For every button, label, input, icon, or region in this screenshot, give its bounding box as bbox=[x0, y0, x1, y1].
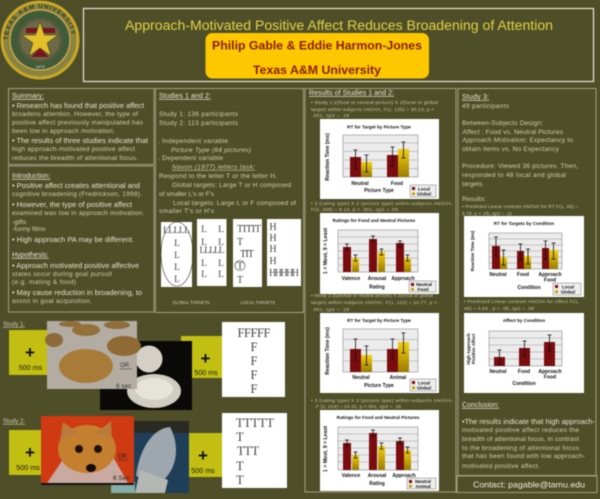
introduction text bbox=[12, 181, 144, 244]
panel: results of studies 1 and 2 bbox=[305, 88, 456, 492]
OR label: OR bbox=[118, 454, 128, 460]
fixation slide: 500 ms bbox=[191, 466, 215, 475]
summary text: positive affect previously manipulated has bbox=[12, 120, 144, 126]
study 3 design text: responded to 48 local and global bbox=[462, 172, 567, 179]
panel: study 3 bbox=[458, 88, 596, 476]
bar chart: RT study 1: Picture Type bbox=[364, 188, 394, 194]
navon card: local H: H bbox=[269, 222, 277, 233]
bar chart: RT by condition bbox=[464, 216, 584, 297]
navon stimulus: letter F: F bbox=[251, 368, 258, 382]
bar chart: ratings study 1: Ratings for Food and Neutral Pictures bbox=[333, 218, 416, 223]
bar chart: RT by condition: Food bbox=[517, 272, 529, 278]
navon stimulus: letter F: F bbox=[251, 340, 258, 354]
navon card: local H: H bbox=[269, 244, 277, 255]
statistics: study 2: .001, ηp2 = .18 bbox=[312, 307, 349, 313]
bar chart: RT study 1 bbox=[320, 119, 439, 199]
heading: summary: Summary: bbox=[12, 93, 44, 100]
navon card: global U: L bbox=[201, 270, 207, 280]
navon card: global L: L bbox=[174, 251, 180, 261]
introduction text: • Positive affect creates attentional and bbox=[12, 181, 140, 190]
conclusion text: to the broadening of attentional focus bbox=[462, 445, 580, 452]
icon: Texas A&M university seal: 1876 bbox=[36, 64, 45, 69]
navon card: global L bbox=[161, 222, 193, 287]
statistics: study 1 bbox=[311, 100, 438, 119]
navon card: local T bbox=[233, 219, 262, 287]
statistics: study 2: target) within-subjects ANOVA, F(1, 112) = 24.77, p < bbox=[311, 300, 437, 306]
summary text: • Research has found that positive affect bbox=[12, 101, 144, 110]
panel: studies 1 and 2 bbox=[156, 88, 304, 312]
conclusion text: •The results indicate that high approach- bbox=[462, 417, 596, 426]
summary text: • The results of three studies indicate that bbox=[12, 136, 148, 145]
statistics: study 1: target) within-subjects ANOVA, F(1, 135) = 30.13, p < bbox=[311, 107, 434, 113]
navon stimulus: letter F: F bbox=[251, 354, 258, 368]
bar chart: RT study 1: Reaction Time (ms) bbox=[325, 133, 331, 181]
authors badge bbox=[206, 33, 429, 78]
conclusion text: breadth of attentional focus, in contrast bbox=[462, 436, 579, 443]
study 3 design text: 5.79, p < .05, ηp2 = .11 bbox=[462, 211, 512, 217]
navon card: global L: L bbox=[174, 263, 180, 273]
bar chart: RT study 1: Neutral bbox=[351, 181, 369, 187]
navon card: global U: L bbox=[201, 259, 207, 269]
navon card: global U: L bbox=[218, 238, 224, 248]
fixation slide: 500 ms bbox=[16, 463, 40, 472]
fixation slide: + bbox=[198, 446, 208, 465]
icon: Texas A&M university seal: TEXAS A&M UNIVERSITY bbox=[3, 3, 76, 40]
bar chart: ratings study 2: Neutral bbox=[415, 479, 431, 484]
OR label bbox=[113, 454, 130, 482]
authors badge: Philip Gable & Eddie Harmon-Jones bbox=[212, 38, 422, 52]
bar chart: affect by condition: Approach bbox=[538, 369, 562, 375]
hypothesis text bbox=[12, 261, 142, 305]
label: study 1: Study 1: bbox=[3, 322, 25, 328]
navon card: global U: LLLLL bbox=[200, 246, 225, 256]
navon card: global U: L bbox=[201, 225, 207, 235]
panel: study 2 trial sequence bbox=[3, 413, 287, 493]
summary text: reduces the breadth of attentional focus. bbox=[12, 155, 138, 162]
authors badge: Texas A&M University bbox=[253, 63, 381, 77]
fixation slide bbox=[9, 430, 45, 475]
heading: studies 1 and 2: Studies 1 and 2: bbox=[159, 93, 211, 100]
introduction text: • However, the type of positive affect bbox=[12, 200, 132, 209]
bar chart: RT by condition: Approach bbox=[538, 272, 562, 278]
navon stimulus: letter T: T bbox=[236, 430, 244, 444]
bar chart: ratings study 1: Neutral bbox=[416, 282, 432, 287]
bar chart: RT study 1: Local bbox=[418, 186, 430, 192]
bar chart: RT by condition: Local bbox=[562, 284, 574, 290]
bar chart: affect by condition: Food bbox=[518, 369, 530, 375]
methods text: Global targets: Large T or H composed bbox=[172, 182, 291, 189]
bar chart: RT study 1: Global bbox=[417, 192, 431, 196]
statistics: study 1 ratings bbox=[311, 201, 453, 213]
fixation slide bbox=[186, 433, 223, 477]
methods text: Picture Type (64 pictures) bbox=[171, 147, 251, 154]
bar chart: ratings study 1: Rating bbox=[369, 284, 385, 290]
OR label: OR bbox=[120, 363, 130, 369]
photo: dog bbox=[41, 416, 134, 485]
statistics: study 2: • Study 2:2(animal or neutral picture) X 2(local or global bbox=[311, 293, 433, 299]
study 3 design text: 49 participants bbox=[462, 103, 510, 110]
OR label bbox=[116, 363, 132, 390]
fixation slide: 500 ms bbox=[19, 363, 43, 372]
bar chart: ratings study 1: Approach bbox=[391, 276, 415, 282]
bar chart: RT study 2: Local bbox=[418, 380, 430, 386]
bar chart: RT by condition: Condition bbox=[517, 285, 541, 291]
methods text bbox=[158, 111, 296, 215]
navon stimulus: letter F bbox=[222, 322, 285, 397]
navon card: global L: L bbox=[174, 239, 180, 249]
navon card: local T: TTTTT bbox=[237, 224, 261, 235]
panel: introduction and hypothesis bbox=[8, 166, 154, 312]
title: Approach-Motivated Positive Affect Reduces Broadening of Attention bbox=[125, 18, 553, 33]
statistics: study 2 ratings: F (2, 224) = 24.32, p <.001, ηp2 = .18 bbox=[316, 404, 401, 410]
navon card: local T: TTT bbox=[240, 249, 254, 260]
OR label: 6 sec bbox=[116, 383, 132, 390]
conclusion text: motivated positive affect reduces the bbox=[462, 427, 579, 434]
study 3 design text: Between-Subjects Design: bbox=[462, 120, 543, 127]
navon stimulus: letter T: TTTTT bbox=[236, 416, 274, 430]
methods text: Study 1: 136 participants bbox=[159, 111, 239, 118]
fixation slide: + bbox=[25, 443, 35, 462]
navon card: local H bbox=[267, 219, 301, 286]
navon stimulus: letter F: F bbox=[251, 382, 258, 396]
introduction text: examined was low in approach motivation: bbox=[12, 210, 144, 217]
navon card: local T: T bbox=[237, 275, 243, 286]
methods text: . Dependent variable bbox=[158, 155, 223, 162]
summary text: been low in approach motivation. bbox=[12, 128, 115, 135]
methods text: Respond to the letter T or the letter H. bbox=[159, 173, 277, 180]
bar chart: RT study 2: Reaction Time (ms) bbox=[325, 327, 331, 375]
photo: shark bbox=[111, 421, 189, 493]
statistics: study 1: • Study 1:2(food or neutral picture) X 2(local or global bbox=[311, 100, 438, 106]
navon stimulus: letter T: T bbox=[236, 473, 244, 487]
fixation slide bbox=[181, 336, 223, 378]
bar chart: affect by condition bbox=[464, 313, 584, 393]
bar chart: ratings study 2: Animal bbox=[415, 484, 431, 489]
statistics: study 1: .001, ηp2 = .18 bbox=[312, 113, 349, 119]
study 3 design text: Procedure: Viewed 36 pictures. Then, bbox=[462, 163, 578, 170]
conclusion text: that has been found with low approach- bbox=[462, 453, 585, 460]
icon: Texas A&M university seal bbox=[0, 0, 80, 80]
navon stimulus: letter T: T bbox=[236, 459, 244, 473]
photo: plates bbox=[100, 341, 192, 410]
hypothesis text: states occur during goal pursuit bbox=[12, 271, 112, 278]
methods text: smaller T's or H's bbox=[159, 208, 215, 215]
navon card: global L: LLLLL bbox=[163, 226, 190, 236]
fixation slide: + bbox=[201, 349, 211, 368]
introduction text: -funny films bbox=[12, 226, 46, 233]
statistics: study 1 ratings: • 3 (rating type) X 2 (picture type) within-subjects ANOVA, bbox=[311, 201, 453, 207]
label: study 2: Study 2: bbox=[3, 419, 25, 425]
navon card: global U: L bbox=[218, 259, 224, 269]
navon stimulus: letter T: TTT bbox=[237, 444, 259, 458]
bar chart: RT study 2: Global bbox=[417, 386, 431, 390]
methods text: Local targets: Large L or F composed of bbox=[173, 200, 296, 207]
introduction text: cognitive broadening (Fredrickson, 1998). bbox=[12, 191, 142, 198]
heading: results: Results of Studies 1 and 2: bbox=[309, 90, 394, 97]
bar chart: RT study 1: Food bbox=[391, 181, 403, 187]
navon card: global U: L bbox=[218, 225, 224, 235]
bar chart: ratings study 2: Valence bbox=[342, 473, 361, 479]
bar chart: ratings study 2: Arousal bbox=[368, 473, 387, 479]
label: local targets: LOCAL TARGETS bbox=[241, 300, 275, 305]
fixation slide bbox=[9, 330, 51, 375]
bar chart: ratings study 2 bbox=[320, 410, 439, 491]
conclusion text bbox=[462, 417, 596, 470]
heading: introduction: Introduction: bbox=[12, 173, 51, 180]
methods text: . Independent variable bbox=[158, 138, 228, 145]
methods text: Study 2: 113 participants bbox=[159, 120, 239, 127]
navon card: global U bbox=[197, 219, 226, 286]
introduction text: -gifts bbox=[12, 219, 27, 226]
statistics: affect contrast bbox=[464, 299, 579, 312]
summary text bbox=[12, 101, 148, 162]
bar chart: affect by condition: Food bbox=[544, 374, 556, 380]
bar chart: affect by condition: Condition bbox=[512, 381, 536, 387]
bar chart: ratings study 2: Ratings for Food and Neutral Pictures bbox=[337, 415, 420, 420]
statistics: affect contrast: 46) = 4.64 , p < .05, ηp2 = .09 bbox=[464, 306, 534, 312]
hypothesis text: • May cause reduction in broadening, to bbox=[12, 288, 142, 297]
bar chart: RT study 2: Neutral bbox=[352, 375, 370, 381]
navon card: global L: L bbox=[174, 275, 180, 285]
statistics: study 2 ratings: • 3 (rating type) X 2 (picture type) within-subjects ANOVA, bbox=[311, 398, 453, 404]
hypothesis text: (e.g. mating & food) bbox=[12, 279, 76, 286]
navon card: local H: H bbox=[269, 256, 277, 267]
bar chart: ratings study 2: Rating bbox=[369, 481, 385, 487]
statistics: study 2 ratings bbox=[311, 398, 453, 410]
bar chart: RT by condition: RT for Targets by Condition bbox=[494, 221, 554, 226]
bar chart: affect by condition: Neutral bbox=[489, 369, 507, 375]
navon card: global U: L bbox=[201, 238, 207, 248]
bar chart: ratings study 1: Arousal bbox=[368, 276, 387, 282]
summary text: broadens attention. However, the type of bbox=[12, 111, 138, 118]
heading: hypothesis: Hypothesis: bbox=[12, 252, 49, 259]
study 3 design text: • Predicted Linear contrast ANOVA for RT F(1, 46) = bbox=[462, 204, 578, 210]
bar chart: affect by condition: Affect by Condition bbox=[503, 318, 545, 323]
bar chart: RT by condition: Food bbox=[544, 278, 556, 284]
panel: study 1 trial sequence bbox=[3, 321, 285, 410]
bar chart: RT by condition: Global bbox=[561, 290, 575, 294]
navon stimulus: letter F: FFFFF bbox=[238, 326, 271, 340]
OR label: 6 Sec bbox=[113, 475, 130, 482]
study 3 design text: Affect : Food vs. Neutral Pictures bbox=[461, 129, 564, 136]
photo: cookies bbox=[45, 321, 141, 390]
introduction text: • High approach PA may be different. bbox=[12, 235, 134, 244]
heading: study 3: Study 3: bbox=[462, 94, 489, 101]
study 3 design text: obtain items vs. No Expectancy bbox=[462, 146, 560, 153]
navon card: local H: HHHHH bbox=[269, 268, 299, 279]
heading: conclusion: Conclusion: bbox=[462, 402, 499, 409]
bar chart: RT study 1: RT for Target by Picture Type bbox=[347, 124, 411, 130]
bar chart: ratings study 1: Valence bbox=[342, 276, 361, 282]
bar chart: ratings study 1: Food bbox=[417, 287, 429, 292]
contact box: Contact: pagable@tamu.edu bbox=[473, 480, 585, 490]
bar chart: RT study 2 bbox=[320, 313, 439, 393]
study 3 design text: targets. bbox=[462, 181, 484, 188]
title panel bbox=[84, 8, 594, 82]
bar chart: affect by condition: High Approach bbox=[466, 333, 471, 365]
bar chart: RT study 2: Animal bbox=[390, 375, 407, 381]
study 3 design text: Results: bbox=[462, 196, 486, 203]
bar chart: ratings study 2: Approach bbox=[392, 473, 416, 479]
bar chart: RT by condition: Neutral bbox=[489, 272, 507, 278]
bar chart: RT study 2: RT for Target by Picture Type bbox=[347, 318, 411, 323]
hypothesis text: • Approach motivated positive affective bbox=[12, 261, 139, 270]
statistics: study 2 bbox=[311, 293, 437, 313]
fixation slide: + bbox=[25, 343, 35, 362]
statistics: affect contrast: • Predicted Linear contrast ANOVA for Affect F(1, bbox=[464, 299, 579, 305]
bar chart: ratings study 2: 1 = Most, 9 = Least bbox=[323, 426, 329, 472]
contact box bbox=[457, 476, 597, 492]
label: global targets: GLOBAL TARGETS bbox=[172, 300, 210, 305]
navon card: local H: H bbox=[269, 233, 277, 244]
methods text: of smaller L's or F's bbox=[159, 191, 215, 198]
bar chart: ratings study 1 bbox=[320, 213, 439, 294]
navon card: global U: L bbox=[218, 270, 224, 280]
methods text: Navon (1977) letters task: bbox=[172, 164, 255, 171]
bar chart: ratings study 1: 1 = Most, 9 = Least bbox=[323, 228, 329, 274]
bar chart: affect by condition: Positive Affect bbox=[471, 333, 476, 364]
navon card: local T: T bbox=[237, 261, 243, 272]
navon card: local T: T bbox=[237, 237, 243, 248]
study 3 design text: Approach Motivation: Expectancy to bbox=[461, 137, 573, 144]
conclusion text: motivated positive affect. bbox=[462, 463, 540, 470]
navon stimulus: letter T bbox=[222, 413, 287, 488]
fixation slide: 500 ms bbox=[194, 368, 218, 377]
study 3 design text bbox=[461, 103, 578, 217]
hypothesis text: assist in goal acquisition. bbox=[12, 298, 92, 305]
statistics: study 1 ratings: F(2, 268) = 8.14, p < .001, ηp2 = .06 bbox=[311, 207, 398, 213]
panel: summary bbox=[8, 88, 154, 164]
bar chart: RT study 2: Picture Type bbox=[364, 383, 394, 389]
bar chart: RT by condition: Reaction Time (ms) bbox=[470, 230, 475, 271]
summary text: high approach-motivated positive affect bbox=[12, 146, 135, 153]
